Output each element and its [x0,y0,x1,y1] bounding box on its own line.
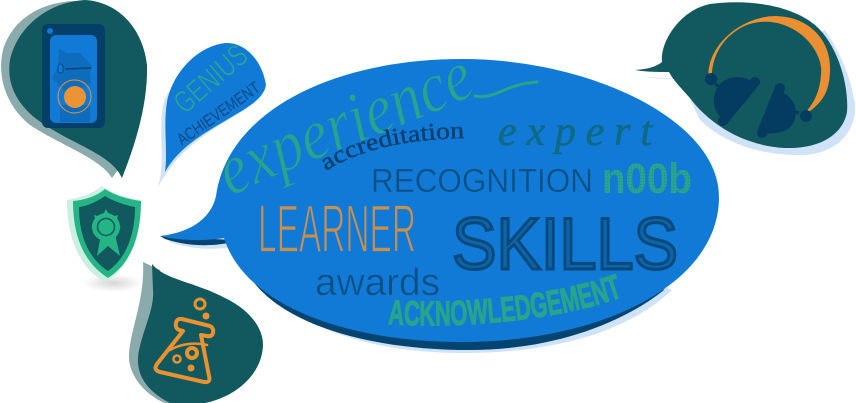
icon: phone [42,24,105,128]
badge: shield with ribbon [67,186,143,292]
avatar silhouette [52,48,92,122]
word: awards: awards [315,262,440,304]
word: expert: expert [498,109,653,155]
word: n00b: n00b [602,155,692,203]
speech bubble: main word cloud: LEARNER [258,191,416,267]
speech bubble: main word cloud [160,59,719,353]
teardrop: phone avatar [1,0,147,178]
teardrop: flask [129,262,263,403]
word: ACKNOWLEDGEMENT: ACKNOWLEDGEMENT [388,274,619,326]
word: ACHIEVEMENT: ACHIEVEMENT [173,78,264,149]
word: accreditation: accreditation [322,124,464,170]
word: experience [224,66,538,193]
word: GENIUS: GENIUS [167,37,254,120]
icon: flask [156,299,213,382]
word: experience: experience [224,66,472,193]
icon: headset [705,17,829,133]
speech bubble: headset [635,2,855,155]
icon: ribbon rosette [91,209,121,256]
word: RECOGNITION: RECOGNITION [371,162,593,199]
word: SKILLS: SKILLS [452,204,678,285]
teardrop: GENIUS ACHIEVEMENT [158,37,266,187]
